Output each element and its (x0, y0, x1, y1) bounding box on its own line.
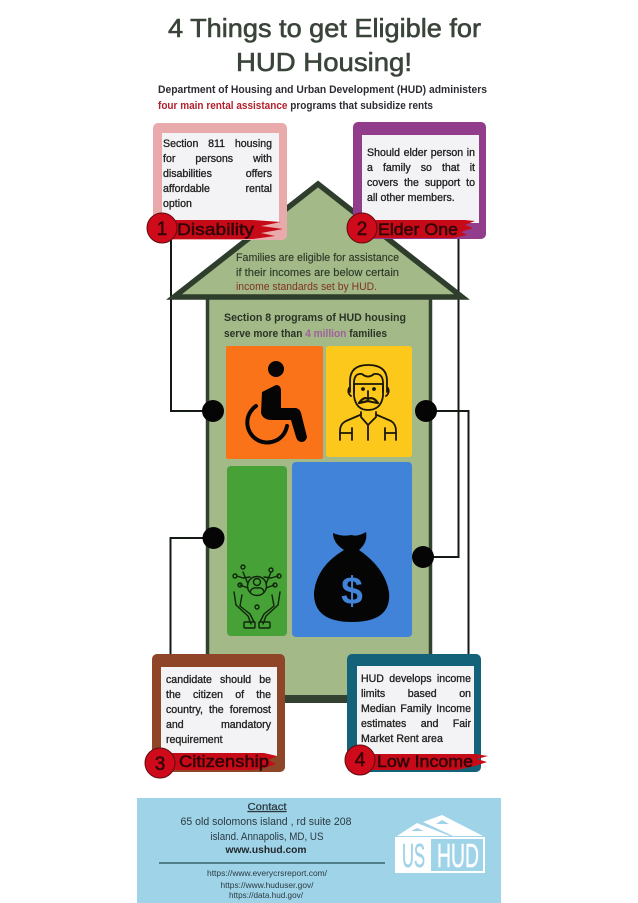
logo: US HUD: HUD (437, 837, 479, 874)
tile: green citizenship (227, 466, 287, 636)
panel 3 label band: 3 (155, 754, 165, 775)
panel 2 description: a family so that it (367, 162, 475, 174)
panel 4 description: Market Rent area (361, 733, 443, 745)
panel 3 label band (144, 748, 277, 778)
panel 4 description (357, 666, 474, 755)
panel 3 description (161, 667, 277, 756)
panel 2 description: covers the support to (367, 177, 475, 189)
panel 1 description (162, 133, 279, 223)
tile: yellow elder (326, 346, 412, 457)
panel 4 description: Median Family Income (361, 703, 471, 715)
icon: money bag: $ (341, 570, 363, 613)
logo: US HUD (395, 815, 485, 874)
panel 1 description: option (163, 198, 192, 210)
panel 4 description: HUD develops income (361, 673, 471, 685)
contact text: www.ushud.com (225, 844, 306, 856)
logo: US HUD: US (402, 837, 425, 874)
contact text (159, 801, 385, 900)
panel 3: citizenship (152, 654, 285, 772)
panel 4: low income (347, 654, 481, 772)
contact text: island. Annapolis, MD, US (210, 831, 324, 843)
panel 4 label band (344, 744, 488, 776)
panel 2 label band (346, 212, 475, 244)
panel 1 label band (146, 212, 283, 244)
panel 3 description: the citizen of the (166, 689, 271, 701)
intro text: four main rental assistance programs that subsidize rents (158, 100, 433, 112)
panel 2: elder one (353, 122, 486, 239)
panel 2 description: all other members. (367, 192, 455, 204)
contact text: https://data.hud.gov/ (229, 890, 304, 900)
panel 4 label band: Low Income (377, 752, 473, 771)
panel 3 label band: Citizenship (179, 752, 269, 771)
panel 4 label band: 4 (355, 750, 366, 771)
panel 1 description: for persons with (163, 153, 272, 165)
title: 4 Things to get Eligible for (168, 13, 481, 43)
contact text: https://www.huduser.gov/ (220, 880, 314, 890)
contact text: https://www.everycrsreport.com/ (207, 868, 328, 878)
panel 2 description: Should elder person in (367, 147, 475, 159)
tile: orange disability (226, 346, 323, 459)
panel 4 description: estimates and Fair (361, 718, 471, 730)
footer contact panel (137, 798, 501, 903)
roof text: income standards set by HUD. (236, 281, 377, 293)
panel 2 label band: 2 (357, 219, 367, 240)
panel 3 description: requirement (166, 734, 223, 746)
panel 1 description: affordable rental (163, 183, 272, 195)
contact text: Contact (248, 801, 287, 813)
tile: blue income (292, 462, 412, 637)
panel 1 label band: 1 (157, 219, 167, 240)
title: HUD Housing! (236, 47, 412, 77)
roof text: Families are eligible for assistance (236, 252, 399, 264)
intro text: Department of Housing and Urban Development (HUD) administers (158, 84, 487, 96)
house roof (174, 184, 462, 297)
title (168, 13, 481, 77)
contact text: 65 old solomons island , rd suite 208 (180, 816, 352, 828)
panel 1 label band: Disability (177, 220, 255, 239)
section 8 text: Section 8 programs of HUD housing (224, 312, 406, 324)
panel 3 description: and mandatory (166, 719, 271, 731)
roof text (236, 252, 399, 293)
house body (205, 296, 433, 703)
panel 3 description: country, the foremost (166, 704, 271, 716)
roof text: if their incomes are below certain (236, 267, 399, 279)
panel 2 label band: Elder One (378, 220, 458, 239)
panel 1 description: disabilities offers (163, 168, 272, 180)
panel 1 description: Section 811 housing (163, 138, 272, 150)
section 8 text: serve more than 4 million families (224, 328, 387, 340)
intro text (158, 84, 487, 112)
panel 3 description: candidate should be (166, 674, 271, 686)
panel 1: disability (153, 123, 287, 240)
section 8 text (224, 312, 406, 340)
panel 2 description (362, 135, 479, 223)
panel 4 description: limits based on (361, 688, 471, 700)
